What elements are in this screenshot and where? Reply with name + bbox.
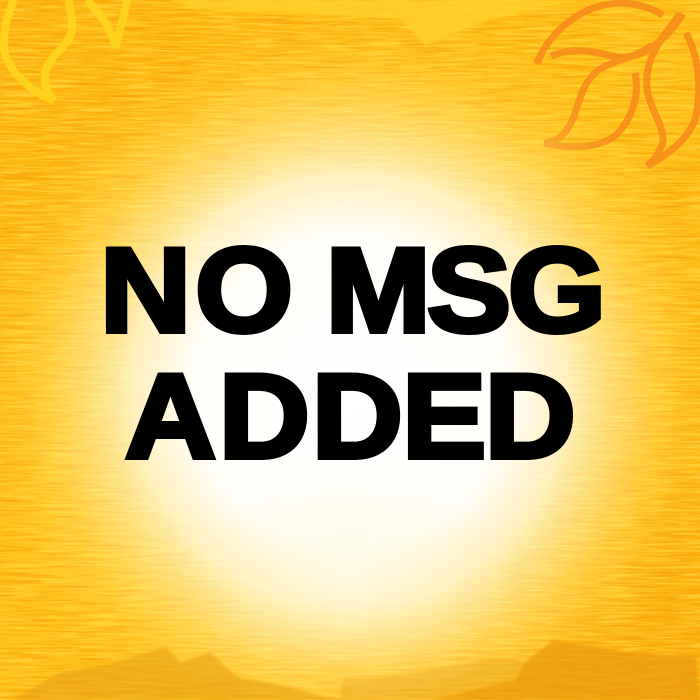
mountain silhouette bottom bbox=[13, 640, 700, 700]
title: NO MSG ADDED bbox=[100, 224, 606, 484]
heading line: NO MSG: NO MSG bbox=[100, 224, 606, 358]
heading line: ADDED: ADDED bbox=[125, 350, 576, 484]
torn paper edge at top bbox=[170, 0, 585, 45]
icon: orange leaves top right bbox=[537, 3, 699, 166]
icon: yellow leaves top left bbox=[4, 0, 127, 101]
